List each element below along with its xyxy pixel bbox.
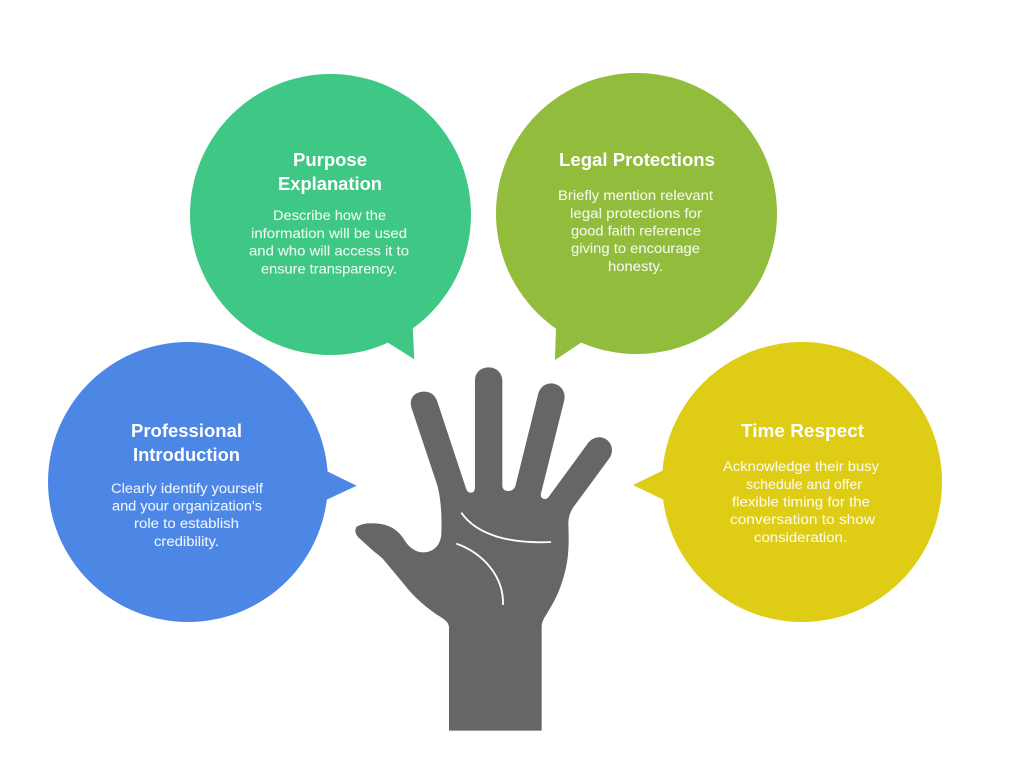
heading: purpose explanation [278, 150, 382, 194]
text: time respect description: conversation to show [730, 512, 875, 527]
heading: purpose explanation: Purpose [293, 150, 367, 170]
heading: time respect: Time Respect [741, 421, 864, 441]
speech bubble: time respect [633, 342, 942, 622]
panel: professional introduction [48, 342, 357, 622]
heading: professional introduction: Introduction [133, 445, 240, 465]
text: purpose explanation description: information will be used [251, 226, 407, 241]
palm line: upper [461, 513, 551, 542]
heading: purpose explanation: Explanation [278, 174, 382, 194]
panel: legal protections [496, 73, 777, 360]
text: time respect description: Acknowledge their busy [723, 459, 879, 474]
speech bubble: purpose explanation [190, 74, 471, 359]
text: purpose explanation description: and who will access it to [249, 244, 409, 258]
text: legal protections description: legal protections for [570, 206, 703, 221]
heading: professional introduction [131, 421, 242, 465]
text: legal protections description: honesty. [608, 259, 663, 274]
text: purpose explanation description: ensure transparency. [261, 262, 397, 276]
text: legal protections description: giving to encourage [571, 241, 700, 256]
panel: purpose explanation [190, 74, 471, 359]
text: time respect description: schedule and offer [746, 477, 863, 492]
text: purpose explanation description: Describe how the [273, 208, 386, 223]
icon: open hand [355, 367, 612, 731]
text: professional introduction description: credibility. [154, 534, 219, 549]
text: professional introduction description: Clearly identify yourself [111, 481, 263, 496]
heading: professional introduction: Professional [131, 421, 242, 441]
speech bubble: legal protections [496, 73, 777, 360]
text: legal protections description: Briefly mention relevant [558, 188, 713, 203]
text: professional introduction description [111, 481, 263, 549]
text: professional introduction description: and your organization's [112, 498, 262, 514]
text: time respect description: flexible timing for the [732, 494, 870, 510]
text: legal protections description [558, 188, 713, 274]
speech bubble: professional introduction [48, 342, 357, 622]
text: time respect description [723, 459, 879, 545]
heading: legal protections: Legal Protections [559, 150, 715, 170]
text: purpose explanation description [249, 208, 409, 276]
panel: time respect [633, 342, 942, 622]
text: legal protections description: good faith reference [571, 224, 701, 238]
palm line: lower [456, 544, 503, 605]
text: professional introduction description: role to establish [134, 516, 239, 531]
text: time respect description: consideration. [754, 530, 847, 545]
